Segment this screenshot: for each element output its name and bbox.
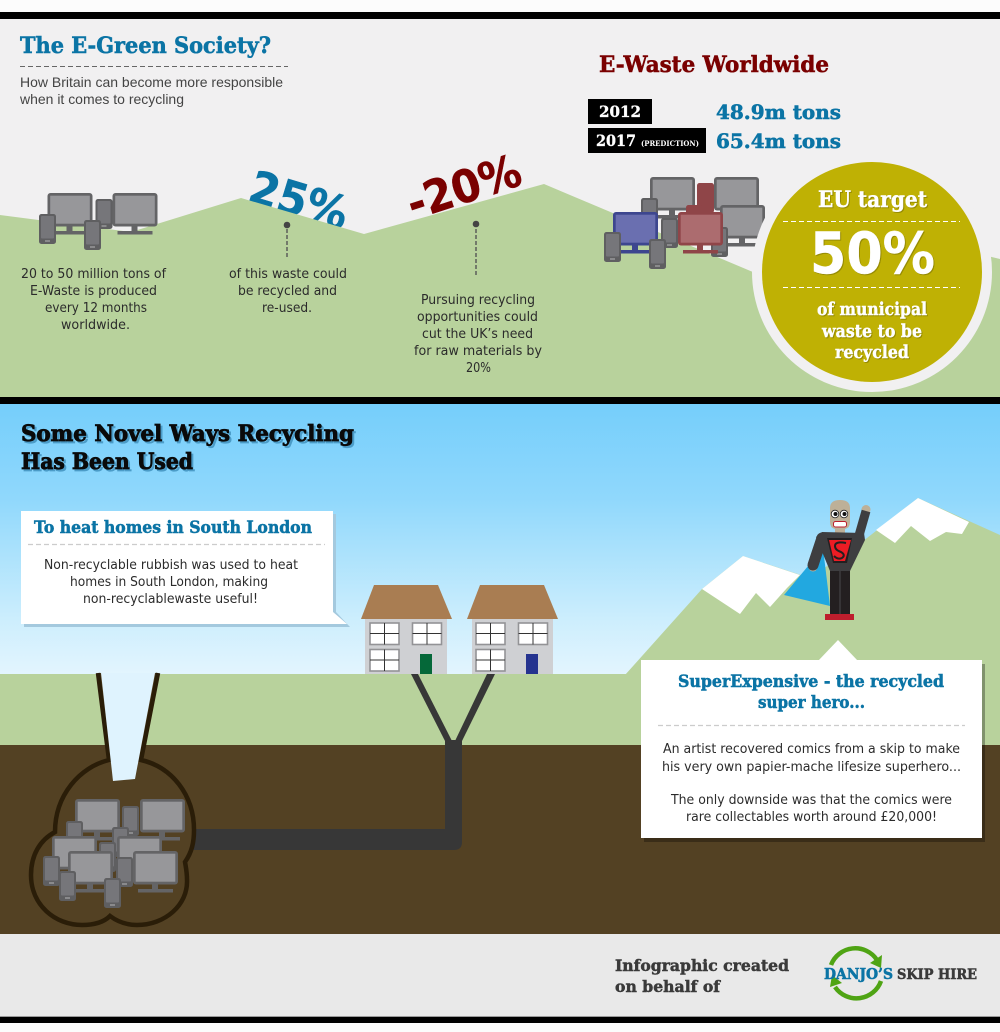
- callout: heat homes: To heat homes in South London: [34, 518, 312, 538]
- superhero figure: [784, 500, 870, 620]
- text: raw materials: [414, 292, 542, 376]
- text: raw materials: Pursuing recycling: [421, 292, 535, 308]
- label: 2017 prediction: [588, 128, 706, 153]
- callout: SuperExpensive: super hero...: [758, 693, 865, 713]
- mountains: [625, 498, 1000, 675]
- callout: EU target: recycled: [835, 342, 909, 363]
- green hills: [0, 184, 1000, 397]
- label: 2017 prediction: 2017: [596, 131, 636, 150]
- panel: E-Green Society: [0, 19, 1000, 397]
- credit text: Infographic created: [615, 956, 789, 975]
- logo: Danjo's Skip Hire: [824, 948, 977, 998]
- callout: heat homes: homes in South London, making: [70, 574, 268, 590]
- callout: EU target: EU target: [818, 187, 928, 213]
- credit text: on behalf of: [615, 977, 721, 996]
- connector: -20%: [473, 221, 479, 277]
- big stat: 25%: 25%: [243, 160, 355, 241]
- panel: novel ways: [0, 404, 1000, 934]
- text: tons produced: E-Waste is produced: [30, 283, 157, 299]
- text: raw materials: for raw materials by: [414, 343, 542, 359]
- house: blue door: [467, 585, 558, 674]
- text: raw materials: cut the UK’s need: [422, 326, 533, 342]
- text: tons produced: 20 to 50 million tons of: [21, 266, 167, 282]
- underground: [0, 745, 1000, 934]
- heating pipes: [190, 674, 495, 850]
- label: 2017 prediction: (PREDICTION): [641, 139, 699, 148]
- heading: E-Waste Worldwide: E-Waste Worldwide: [599, 52, 829, 78]
- heading: Has Been Used: [21, 449, 193, 475]
- value: 2017 tons: 65.4m tons: [716, 129, 841, 153]
- value: 2012 tons: 48.9m tons: [716, 100, 841, 124]
- credit text: [615, 956, 789, 996]
- icon: buried devices: [43, 799, 185, 908]
- text: tons produced: [21, 266, 167, 333]
- heading: The E-Green Society?: [20, 33, 271, 59]
- callout: SuperExpensive: The only downside was that the comics were: [670, 792, 952, 808]
- text: recycled share: re-used.: [262, 300, 312, 316]
- text: raw materials: opportunities could: [417, 309, 538, 325]
- heading: Some Novel Ways Recycling: [21, 421, 354, 447]
- callout: EU target: waste to be: [821, 321, 922, 342]
- text: recycled share: [229, 266, 347, 316]
- callout: SuperExpensive: SuperExpensive - the recycled: [678, 672, 944, 692]
- callout: EU target: 50%: [810, 221, 935, 287]
- heading: [21, 421, 354, 475]
- callout: SuperExpensive: An artist recovered comics from a skip to make: [663, 741, 960, 757]
- logo: Danjo's Skip Hire: DANJO’S: [824, 966, 893, 983]
- callout: SuperExpensive: [641, 640, 985, 842]
- subheading: when it comes to recycling: [19, 91, 184, 107]
- callout: heat homes: Non-recyclable rubbish was used to heat: [44, 557, 298, 573]
- footer: [0, 934, 1000, 1023]
- text: tons produced: worldwide.: [61, 317, 130, 333]
- subheading: How Britain can become more responsible: [20, 74, 283, 90]
- text: tons produced: every 12 months: [45, 300, 147, 316]
- ground: [0, 674, 1000, 745]
- underground landfill cavern: [31, 673, 194, 925]
- label: 2012: 2012: [599, 102, 641, 121]
- icon: device pile: [604, 177, 765, 269]
- callout: heat homes: [21, 511, 350, 627]
- top black bar: [0, 12, 1000, 19]
- callout: SuperExpensive: his very own papier-mache lifesize superhero...: [662, 759, 961, 775]
- big stat: -20%: -20%: [400, 144, 528, 230]
- text: recycled share: be recycled and: [238, 283, 337, 299]
- subheading: [19, 74, 283, 107]
- text: raw materials: 20%: [466, 360, 491, 376]
- cavern shaft: [101, 673, 155, 781]
- connector: 25%: [284, 222, 290, 258]
- text: recycled share: of this waste could: [229, 266, 347, 282]
- icon: devices: [39, 193, 158, 250]
- label: 2012: [588, 99, 652, 124]
- callout: SuperExpensive: rare collectables worth around £20,000!: [686, 809, 937, 825]
- black divider: [0, 397, 1000, 404]
- callout: heat homes: non-recyclablewaste useful!: [83, 591, 258, 607]
- logo: Danjo's Skip Hire: SKIP HIRE: [897, 967, 977, 983]
- callout: EU target: [752, 152, 992, 392]
- house: green door: [361, 585, 452, 674]
- callout: EU target: of municipal: [817, 299, 927, 320]
